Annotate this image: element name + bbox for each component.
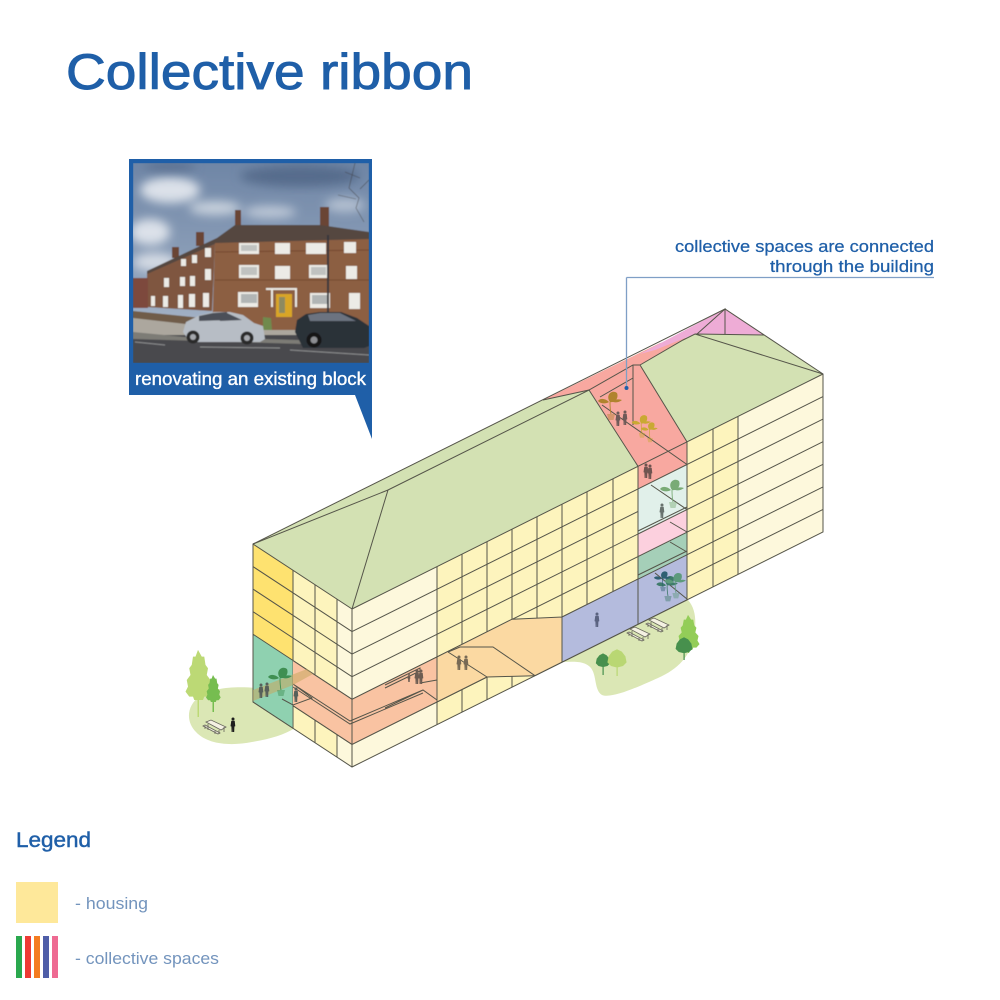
people in orange ribbon (456, 656, 468, 670)
housing label: - housing (75, 894, 148, 913)
people and plants (258, 392, 686, 702)
pale teal ribbon (638, 464, 687, 534)
collective spaces label: - collective spaces (75, 949, 219, 968)
people in teal space (258, 682, 298, 702)
salmon ribbon long side (352, 657, 437, 744)
callout: collective spaces connected: through the building (770, 258, 934, 276)
plants in purple ribbon (654, 571, 686, 601)
short facade housing (293, 570, 337, 757)
dark small tree (676, 637, 692, 660)
long facade base (352, 374, 823, 767)
plant in pale teal space (660, 480, 684, 508)
left trees (186, 650, 221, 717)
right trees (596, 615, 700, 676)
short facade: strong yellow housing (253, 544, 293, 661)
light round tree (607, 649, 627, 676)
teal ground-floor collective space (253, 634, 293, 728)
pink roof gable (640, 309, 764, 354)
standing figure by bench (230, 718, 235, 732)
ground patch: right (560, 600, 695, 696)
grid lines (253, 397, 823, 757)
callout: renovating an existing block (129, 159, 372, 439)
legend (16, 829, 219, 978)
callout text: collective spaces are connected (675, 238, 934, 256)
callout: collective spaces connected (624, 238, 934, 390)
salmon roof passage (543, 337, 690, 489)
dark green ribbon (638, 532, 687, 579)
plant in roof passage (598, 392, 622, 420)
pink ribbon (638, 510, 687, 557)
plant in teal space (268, 668, 292, 696)
right benches (627, 618, 669, 641)
translucent strip across teal space (253, 669, 313, 701)
long facade housing (437, 416, 738, 725)
left bench (203, 720, 226, 734)
ribbon and roof outlines (253, 309, 823, 767)
large light tree (186, 650, 212, 717)
housing swatch (16, 882, 58, 923)
photo of existing block (130, 163, 369, 363)
underline and leader line (626, 278, 934, 388)
tall green tree (678, 615, 700, 653)
person in purple ribbon (594, 612, 599, 627)
short facade base (253, 544, 352, 767)
speech-bubble frame (129, 159, 372, 439)
people in roof passage (616, 410, 627, 426)
title: Collective ribbon (66, 44, 473, 100)
people in salmon ribbon (408, 670, 423, 684)
salmon ribbon short side (293, 661, 352, 744)
person in pale teal space (660, 504, 664, 518)
purple ribbon (562, 555, 687, 662)
collective space swatches (16, 936, 58, 978)
green roof right (640, 334, 823, 442)
isometric building (253, 309, 823, 767)
people at roof wall (644, 464, 652, 479)
dark round tree (596, 653, 610, 675)
silver car (183, 312, 265, 342)
leader dot (624, 386, 628, 390)
yellow plants in roof passage (632, 415, 658, 442)
legend heading: Legend (16, 829, 91, 852)
ground patch: left (189, 687, 295, 744)
dark car (295, 312, 369, 348)
light orange ribbon (437, 617, 562, 702)
green roof left (253, 390, 638, 609)
small green tree (206, 675, 221, 712)
caption: renovating an existing block (135, 369, 367, 389)
